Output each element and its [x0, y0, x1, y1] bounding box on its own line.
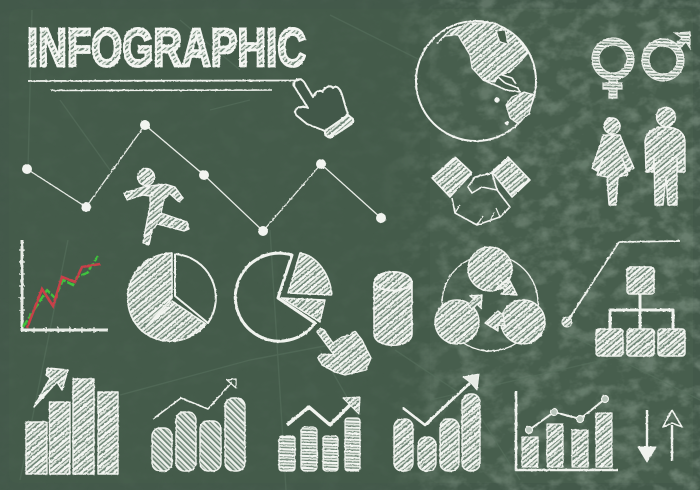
bar chart with axes and dotted line	[516, 391, 618, 470]
organisation chart	[596, 267, 685, 356]
bar chart with thick arrow	[394, 374, 480, 471]
small line chart with red and green lines	[19, 240, 108, 333]
exploded pie chart	[235, 253, 332, 341]
icon: cylinder	[374, 272, 412, 345]
icon: man figure	[645, 108, 685, 205]
line chart with dots	[22, 120, 386, 236]
title: INFOGRAPHIC	[27, 18, 306, 78]
bar chart with rising arrow	[26, 368, 118, 474]
title underlines	[28, 80, 296, 90]
leader line with dot	[562, 241, 680, 327]
cycle diagram with arrows	[435, 247, 545, 351]
rounded bar chart with thin arrow	[152, 379, 245, 471]
icon: female symbol	[592, 38, 634, 98]
icon: running person	[124, 168, 189, 245]
icon: handshake	[432, 157, 530, 225]
pie chart	[128, 253, 216, 341]
icon: pointing hand hatched	[317, 329, 371, 375]
icon: male symbol	[642, 32, 690, 81]
icon: woman figure	[592, 118, 634, 205]
striped bar chart with arrow	[279, 397, 360, 471]
icon: pointing hand	[294, 79, 353, 138]
icon: globe	[416, 21, 536, 141]
icon: up arrow	[663, 410, 682, 461]
icon: down arrow	[638, 410, 656, 462]
